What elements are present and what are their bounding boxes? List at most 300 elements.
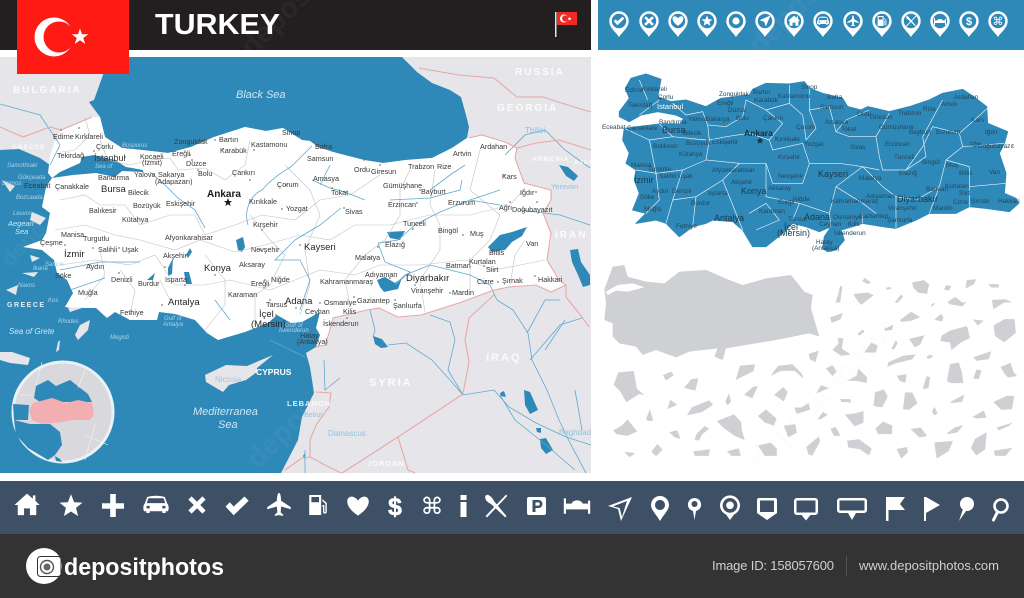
text: province map labels: Erzurum	[936, 129, 960, 136]
text: province map labels: Bolu	[736, 115, 749, 122]
text: province map labels: Aydın	[652, 188, 669, 195]
text: province map labels: Van	[989, 169, 1000, 176]
text: foreign cities: Nicosia	[215, 375, 242, 384]
text: cities: Adana	[285, 296, 313, 307]
text: province map labels: Gümüşhane	[879, 124, 914, 131]
text: cities: Kayseri	[304, 242, 336, 253]
panel: pin icon bar: $	[966, 16, 972, 28]
text: province map labels: Osmaniye	[833, 214, 862, 221]
text: cities: Hakkari	[538, 275, 563, 284]
text: cities: Zonguldak	[174, 137, 208, 146]
text: seas: Sea of	[95, 164, 114, 170]
icon: car	[143, 496, 169, 513]
city dots	[61, 128, 537, 318]
text: province map labels: Bafra	[827, 94, 843, 101]
text: seas: Lesvos	[13, 211, 32, 217]
text: cities: İzmir	[64, 249, 85, 260]
text: foreign cities: Damascus	[328, 429, 366, 438]
icon: info	[460, 495, 466, 517]
text: province map labels: Manisa	[631, 162, 652, 169]
text: foreign cities: Yerevan	[551, 182, 578, 191]
text: country names: GEORGIA	[497, 103, 558, 114]
text: cities: Konya	[204, 263, 232, 274]
text: province map labels: Ereğli	[778, 199, 794, 206]
text: province map labels: Amasya	[825, 119, 849, 126]
text: cities: Manisa	[61, 230, 84, 239]
text: cities: Edirne	[53, 132, 74, 141]
header bar	[0, 0, 591, 50]
text: cities: Tarsus	[266, 300, 288, 309]
text: cities: Bafra	[315, 142, 332, 151]
text: province map labels: Sakarya	[706, 116, 730, 123]
text: cities: Düzce	[186, 159, 206, 168]
text: province map labels: Kastamonu	[778, 93, 811, 100]
text: seas: Gulf of	[285, 323, 304, 329]
text: province map labels: Adıyaman	[866, 193, 895, 200]
text: province map labels: Çorlu	[658, 94, 674, 101]
text: province map labels: İzmir	[634, 175, 654, 185]
icon: cross	[188, 496, 206, 514]
text: cities: Çanakkale	[55, 182, 89, 191]
land: Turkey	[23, 117, 566, 347]
text: country names: AZER	[574, 160, 594, 166]
scattered province silhouettes	[612, 277, 1019, 460]
text icon: dollar: $	[388, 493, 402, 521]
inset globe	[13, 362, 113, 462]
icon: parking	[527, 497, 546, 515]
text: province map labels: Isparta	[708, 190, 728, 197]
icon: map pin	[651, 496, 669, 521]
text: seas: Mediterranea	[193, 406, 258, 418]
text: capital Ankara	[207, 189, 241, 206]
icon: fuel	[309, 495, 327, 515]
text: cities: Mardin	[452, 288, 474, 297]
logo: depositphotos: depositphotos	[64, 554, 224, 581]
icon: fork and knife	[483, 493, 507, 517]
text: province map labels: Cizre	[953, 199, 968, 206]
text: province map labels: Çorum	[796, 124, 815, 131]
panel: pin icon bar: ⌘	[992, 15, 1004, 28]
text: province map labels: Iğdır	[985, 129, 999, 136]
Cyprus	[205, 355, 273, 392]
icon: small pin	[688, 498, 701, 520]
text: cities: Bilecik	[128, 188, 149, 197]
text: seas: Ikaria	[33, 266, 48, 272]
text: province map labels: Bartın	[753, 89, 770, 96]
icon: Turkish flag large	[17, 0, 129, 74]
Greek islands	[0, 180, 90, 365]
text: province map labels: Nevşehir	[778, 173, 804, 180]
country borders	[0, 68, 591, 473]
panel: footer	[0, 534, 1024, 598]
icon: pennant flag	[924, 497, 940, 521]
text: cities: Bartın	[219, 135, 238, 144]
text: seas: Sea	[15, 227, 28, 236]
icon: star	[59, 494, 83, 516]
text: seas: Black Sea	[236, 89, 286, 101]
text: province map labels: Hatay	[816, 239, 833, 246]
text: cities: Ereğli	[251, 279, 270, 288]
text: cities: Karabük	[220, 146, 247, 155]
text: cities: Bandırma	[98, 173, 129, 182]
text: province map labels: Ankara	[744, 128, 773, 138]
icon: target pin	[720, 495, 740, 520]
text: province map labels: Bozüyük	[686, 140, 711, 147]
text: province map labels: Tunceli	[894, 154, 914, 161]
text: cities: Kars	[502, 172, 517, 181]
text: province map labels: Uşak	[678, 173, 693, 180]
panel: pin icon bar	[598, 0, 1024, 50]
text: cities: Ceyhan	[305, 307, 330, 316]
text: cities: Artvin	[453, 149, 471, 158]
text: country names: RUSSIA	[515, 67, 565, 78]
text: province map labels: Yozgat	[804, 141, 824, 148]
text: cities: Kırıkkale	[249, 197, 277, 206]
text: province map labels: Doğubayazıt	[978, 143, 1014, 150]
text: seas: Gökçeada	[18, 175, 46, 181]
text: province map labels: Erzincan	[885, 141, 910, 148]
text: province map labels: Karabük	[754, 97, 779, 104]
text: cities: Muğla	[78, 288, 98, 297]
text: cities: Bolu	[198, 169, 212, 178]
text: cities	[24, 128, 563, 346]
text: cities: Samsun	[307, 154, 333, 163]
text: cities: Osmaniye	[324, 298, 356, 307]
text: cities: Çankırı	[232, 168, 255, 177]
text: cities: Batman	[446, 261, 471, 270]
icon: plus	[102, 494, 124, 517]
text: cities: Ereğli	[172, 149, 191, 158]
text: province map labels: Artvin	[941, 101, 958, 108]
rivers	[0, 104, 591, 473]
text: cities: Amasya	[313, 174, 339, 183]
text: cities: Kahramanmaraş	[320, 277, 374, 286]
text: cities: Antalya	[168, 297, 200, 308]
text: cities: Ordu	[354, 165, 370, 174]
text: cities: Hatay	[300, 331, 319, 340]
panel: bottom icon bar	[0, 481, 1024, 534]
text: cities: Sinop	[282, 128, 300, 137]
text: cities: Muş	[470, 229, 484, 238]
text: province map labels: Afyonkarahisar	[712, 167, 755, 174]
panel: blue province map	[602, 74, 1020, 252]
text: cities: Isparta	[165, 275, 187, 284]
text: website: www.depositphotos.com	[858, 558, 999, 573]
text: cities: Kilis	[343, 307, 357, 316]
text icon: command: ⌘	[420, 494, 444, 520]
text: cities: Ağrı	[499, 203, 512, 212]
text: cities: Burdur	[138, 279, 160, 288]
watermarks: depositphotos	[240, 311, 404, 475]
text: cities: (Antakya)	[297, 337, 328, 346]
text: province map labels: Kütahya	[679, 151, 703, 158]
text: cities: Kütahya	[122, 215, 148, 224]
text: province map labels: (Mersin)	[777, 228, 810, 238]
icon: tag pin	[757, 498, 777, 520]
text: country names: CYPRUS	[256, 367, 292, 377]
text: province map labels: Turgutlu	[648, 166, 672, 173]
text: seas: Limnos	[2, 181, 21, 187]
text: cities: Yalova	[134, 170, 155, 179]
text: cities: Söke	[55, 271, 71, 280]
text: province map labels: Bandırma	[659, 119, 687, 126]
text: country names: ARMENIA	[532, 156, 569, 163]
text: province map labels: Ardahan	[954, 94, 979, 101]
text: province map labels: Malatya	[859, 175, 882, 182]
icon: check	[226, 497, 249, 515]
text: province map labels: Kırklareli	[642, 86, 667, 93]
text: cities: Yozgat	[286, 204, 308, 213]
text: province map labels: Bitlis	[959, 170, 972, 177]
text: cities: Kastamonu	[251, 140, 287, 149]
text: province map labels: Trabzon	[898, 110, 922, 117]
text: cities: Uşak	[122, 245, 139, 254]
logo: depositphotos	[26, 548, 224, 584]
text: cities: Akşehir	[163, 251, 188, 260]
text: province map labels: Şırnak	[971, 198, 990, 205]
text: seas: Bozcaada	[16, 195, 43, 201]
text: country names: BULGARIA	[13, 85, 82, 96]
icon: navigation arrow	[608, 497, 632, 521]
text: province map labels: Kilis	[848, 221, 860, 228]
text: cities: Denizli	[111, 275, 133, 284]
text: province map labels: İçel	[784, 222, 798, 232]
text: province map labels: Batman	[926, 186, 948, 193]
text: province map labels: Elazığ	[899, 170, 917, 177]
text: country names: IRAQ	[486, 352, 522, 364]
divider	[846, 556, 847, 576]
text: seas: Antalya	[162, 322, 184, 328]
text: province map labels: İstanbul	[657, 102, 684, 111]
text: cities: Tunceli	[403, 219, 426, 228]
text: seas: Iskenderun	[279, 328, 309, 334]
text: cities: Sivas	[345, 207, 363, 216]
text: country names: IRAN	[555, 230, 587, 241]
text: province map labels: Eceabat	[602, 124, 626, 131]
text: seas: Sea of Grete	[9, 327, 55, 336]
text: cities: (Adapazarı)	[155, 177, 193, 186]
icon: bed	[564, 498, 590, 514]
text: country names: SYRIA	[369, 377, 413, 389]
text: province map labels: Fethiye	[676, 223, 697, 230]
icon: house	[14, 494, 40, 515]
text: cities: Şanlıurfa	[393, 301, 422, 310]
text: province map labels: Kırıkkale	[775, 136, 800, 143]
text: country names: JORDAN	[367, 459, 405, 468]
text: foreign cities: Baghdad	[559, 428, 591, 437]
text: image id: Image ID: 158057600	[712, 558, 834, 573]
icon: flag	[886, 497, 905, 521]
text: province map labels: Denizli	[672, 188, 691, 195]
text: province map labels: Muş	[946, 162, 958, 169]
watermarks	[0, 0, 906, 475]
text: cities: Turgutlu	[83, 234, 109, 243]
text: province map labels: Hakkari	[998, 198, 1020, 205]
text: cities: İçel	[259, 309, 274, 320]
text: country names: GREECE	[12, 144, 45, 151]
text: province map labels: Kırşehir	[778, 154, 801, 161]
text: cities: Nevşehir	[251, 245, 280, 254]
text: cities: Eskişehir	[166, 199, 196, 208]
text: province map labels: Karaman	[759, 208, 785, 215]
icon: push pin	[959, 497, 974, 521]
text: cities: Cizre	[477, 277, 494, 286]
text: cities: Kocaeli	[140, 152, 164, 161]
text: province map labels: Tarsus	[788, 216, 807, 223]
text: seas: Bosporus	[122, 143, 147, 149]
text: province map labels: Giresun	[870, 114, 893, 121]
text: seas: Sea	[218, 419, 238, 431]
text: province map labels: Şanlıurfa	[887, 217, 913, 224]
text: province map labels: Çankırı	[763, 115, 784, 122]
text: cities: Malatya	[355, 253, 380, 262]
text: province map labels: Edirne	[625, 87, 644, 94]
text: cities: İstanbul	[94, 153, 126, 163]
Sea of Marmara	[52, 155, 143, 178]
text: cities: Afyonkarahisar	[165, 233, 214, 242]
text: cities: Kurtalan	[469, 257, 496, 266]
text: province map labels: Sinop	[801, 84, 818, 91]
text: cities: Eceabat	[24, 181, 50, 190]
icon: plane	[267, 493, 291, 516]
text: cities: (İzmit)	[142, 158, 162, 167]
text: province map labels: Düzce	[728, 107, 747, 114]
text: cities: Ardahan	[480, 142, 507, 151]
Aegean and Mediterranean sea	[0, 149, 330, 473]
text: province map labels: Tokat	[841, 126, 856, 133]
icon: speech bubble	[794, 498, 818, 520]
Black Sea	[89, 57, 469, 163]
province borders	[55, 118, 545, 330]
title: TURKEY	[155, 9, 280, 41]
text: cities: Gümüşhane	[383, 181, 422, 190]
text: cities: Balıkesir	[89, 206, 117, 215]
text: cities: Sakarya	[158, 170, 184, 179]
text: province map labels: Muğla	[644, 206, 662, 213]
text: province map labels: Ereğli	[717, 100, 733, 107]
text: cities: Erzincan	[388, 200, 416, 209]
text: province map labels: Bingöl	[922, 159, 940, 166]
text: cities: Bozüyük	[133, 201, 161, 210]
text: province map labels: Kayseri	[818, 169, 848, 179]
text: country names: LEBANON	[287, 399, 331, 408]
text: foreign cities: Tbilisi	[525, 126, 546, 135]
text: cities: Bingöl	[438, 226, 458, 235]
text: cities: Tekirdağ	[57, 151, 84, 160]
text: province map labels: Gaziantep	[859, 213, 889, 220]
text: cities: Fethiye	[120, 308, 144, 317]
text: cities: Tokat	[331, 188, 348, 197]
text: province map labels: Ağrı	[969, 141, 981, 148]
watermarks: depositphotos	[742, 311, 906, 475]
text: province map labels: Konya	[741, 186, 767, 196]
text: province map labels: Bayburt	[909, 129, 931, 136]
text: province map labels: Ceyhan	[819, 221, 841, 228]
text: foreign cities	[215, 126, 591, 438]
text: cities: Trabzon	[408, 162, 434, 171]
text: cities: Çeşme	[40, 238, 63, 247]
text: cities: Bursa	[101, 184, 127, 195]
text: province map labels: Salihli	[659, 173, 676, 180]
text: province map labels: Tekirdağ	[628, 102, 653, 109]
text: province map labels: Balıkesir	[653, 143, 678, 150]
text: seas: Megisti	[110, 335, 130, 341]
text: cities: Doğubayazıt	[512, 205, 552, 214]
text: province map labels: Bilecik	[683, 130, 702, 137]
text: cities: Elazığ	[385, 240, 405, 249]
text: cities: Rize	[437, 162, 451, 171]
icon: small flag	[555, 12, 577, 37]
text: country names	[7, 67, 594, 468]
text: cities: Çorum	[277, 180, 299, 189]
text: seas: Aegean	[7, 219, 34, 228]
panel: main map	[0, 57, 594, 473]
text: province map labels: Kahramanmaraş	[831, 198, 878, 205]
text: cities: Diyarbakır	[406, 273, 449, 284]
text: province map labels: Kars	[971, 117, 984, 124]
text: seas: Samos	[45, 262, 64, 268]
text: province map labels: Aksaray	[768, 185, 792, 192]
text: province map labels: İskenderun	[834, 228, 866, 237]
text: seas: Rhodes	[58, 319, 79, 325]
text: seas: Kos	[48, 298, 58, 304]
text: seas: Naxos	[18, 283, 35, 289]
text: province map labels: Viranşehir	[888, 205, 918, 212]
text: cities: Bitlis	[489, 248, 505, 257]
text: capital Ankara: Ankara	[207, 189, 241, 200]
text: cities: Salihli	[98, 245, 118, 254]
text: cities: Şırnak	[502, 276, 523, 285]
text: province map labels: Siirt	[959, 190, 970, 197]
icon: heart	[347, 497, 369, 516]
text: cities: Erzurum	[448, 198, 475, 207]
text: province map labels: Sivas	[850, 144, 866, 151]
icon: magnifier	[994, 500, 1008, 520]
text: cities: Viranşehir	[411, 286, 444, 295]
text: province map labels: Zonguldak	[719, 91, 750, 98]
text: cities: (Mersin)	[251, 319, 286, 330]
text: cities: Aydın	[86, 262, 104, 271]
text: province map labels: Adana	[804, 212, 830, 222]
text: cities: Adıyaman	[365, 270, 397, 279]
text: cities: Niğde	[271, 275, 290, 284]
text: province map labels: Samsun	[820, 104, 844, 111]
text: cities: Karaman	[228, 290, 257, 299]
text: province map labels: Çanakkale	[627, 125, 658, 132]
text: cities: Kırklareli	[75, 132, 103, 141]
white province borders	[624, 80, 1006, 230]
text: province map labels: Kurtalan	[945, 183, 969, 190]
text: province map labels: Antalya	[714, 213, 744, 223]
text: cities: Gaziantep	[357, 296, 390, 305]
text: cities: Bayburt	[421, 187, 446, 196]
text: country names: GREECE	[7, 302, 46, 309]
text: cities: Iğdır	[520, 188, 535, 197]
text: seas	[2, 89, 309, 431]
text: foreign cities: Beirut	[304, 412, 322, 419]
lakes	[147, 165, 590, 460]
text: cities: İskenderun	[323, 319, 359, 328]
text: cities: Giresun	[371, 167, 396, 176]
text: province map labels: Eskişehir	[712, 139, 739, 146]
text: cities: Van	[526, 239, 538, 248]
text: province map labels: Akşehir	[731, 179, 753, 186]
text: cities: Çorlu	[96, 142, 113, 151]
text: province map labels: Rize	[923, 106, 936, 113]
text: province map labels: Ordu	[857, 111, 872, 118]
text: cities: Kırşehir	[253, 220, 278, 229]
text: province map labels: Niğde	[793, 196, 810, 203]
